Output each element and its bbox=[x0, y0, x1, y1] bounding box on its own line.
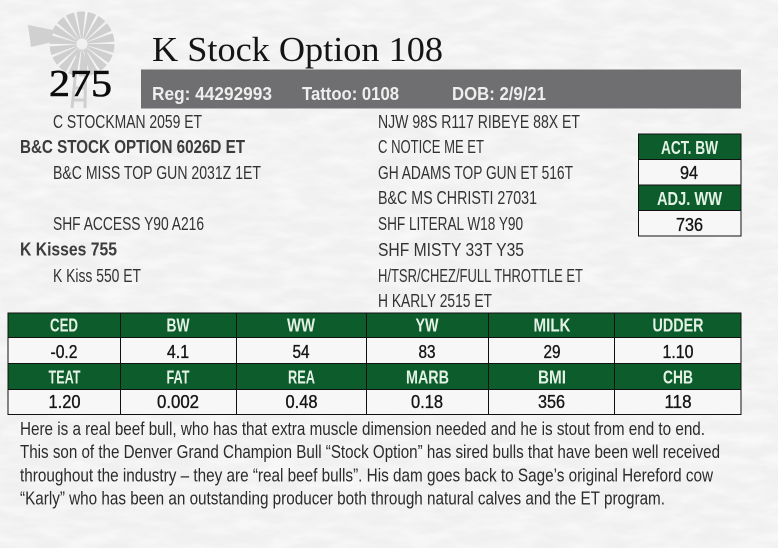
description paragraph bbox=[20, 419, 720, 508]
pedigree: right column: H/TSR/CHEZ/FULL THROTTLE ET bbox=[378, 266, 583, 286]
icon: windmill watermark bbox=[28, 25, 101, 108]
adjusted weaning weight: ADJ. WW bbox=[657, 188, 722, 209]
EPD row 1 values: 29 bbox=[544, 341, 560, 362]
EPD row 2 values: 0.48 bbox=[286, 391, 318, 412]
pedigree: left column: SHF ACCESS Y90 A216 bbox=[53, 214, 204, 234]
EPD row 2 headers: CHB bbox=[663, 366, 693, 388]
EPD row 1 headers: YW bbox=[416, 314, 439, 336]
description paragraph: “Karly” who has been an outstanding producer both through natural calves and the ET program. bbox=[20, 488, 665, 508]
EPD row 2 headers: MARB bbox=[406, 366, 449, 388]
pedigree: right column: B&C MS CHRISTI 27031 bbox=[378, 188, 537, 208]
tattoo: Tattoo: 0108 bbox=[302, 84, 399, 104]
pedigree: right column: C NOTICE ME ET bbox=[378, 137, 484, 157]
EPD row 1 values: 1.10 bbox=[662, 341, 694, 362]
pedigree: left column bbox=[20, 112, 261, 286]
EPD row 1 headers: CED bbox=[50, 314, 78, 336]
EPD row 2 headers: BMI bbox=[538, 366, 566, 388]
EPD row 1 headers: UDDER bbox=[652, 314, 704, 336]
EPD row 2 values bbox=[48, 391, 692, 412]
EPD row 1 values: 54 bbox=[292, 341, 310, 362]
pedigree: right column: H KARLY 2515 ET bbox=[378, 291, 492, 311]
pedigree: left column: B&C MISS TOP GUN 2031Z 1ET bbox=[53, 163, 261, 183]
EPD row 2 values: 0.002 bbox=[157, 391, 199, 412]
EPD row 2 headers: FAT bbox=[166, 366, 190, 388]
EPD row 1 headers: WW bbox=[287, 314, 315, 336]
EPD row 2 values: 356 bbox=[538, 391, 565, 412]
EPD row 2 headers bbox=[48, 366, 693, 388]
pedigree: right column bbox=[378, 112, 583, 311]
EPD row 1 headers bbox=[50, 314, 704, 336]
EPD row 1 values: -0.2 bbox=[50, 341, 78, 362]
actual birth weight: ACT. BW bbox=[661, 137, 718, 158]
pedigree: right column: SHF LITERAL W18 Y90 bbox=[378, 214, 523, 234]
pedigree: right column: NJW 98S R117 RIBEYE 88X ET bbox=[378, 112, 580, 132]
EPD row 2 values: 0.18 bbox=[411, 391, 443, 412]
EPD row 1 values: 83 bbox=[418, 341, 436, 362]
weights table bbox=[638, 134, 741, 236]
EPD row 1 headers: MILK bbox=[534, 314, 571, 336]
EPD row 1 values bbox=[50, 341, 694, 362]
EPD row 2 values: 118 bbox=[664, 391, 692, 412]
pedigree: left column: K Kiss 550 ET bbox=[53, 266, 141, 286]
pedigree: right column: SHF MISTY 33T Y35 bbox=[378, 240, 524, 260]
weights table: 736 bbox=[676, 214, 703, 235]
EPD row 2 headers: REA bbox=[288, 366, 315, 388]
pedigree: left column: B&C STOCK OPTION 6026D ET bbox=[20, 137, 245, 157]
weights table: 94 bbox=[680, 162, 698, 183]
pedigree: left column: K Kisses 755 bbox=[20, 240, 117, 260]
date of birth: DOB: 2/9/21 bbox=[452, 84, 546, 104]
lot number: 275 bbox=[49, 63, 112, 105]
pedigree: left column: C STOCKMAN 2059 ET bbox=[53, 112, 202, 132]
EPD row 2 headers: TEAT bbox=[48, 366, 81, 388]
registration bar bbox=[141, 70, 741, 108]
title: K Stock Option 108 bbox=[152, 30, 443, 69]
pedigree: right column: GH ADAMS TOP GUN ET 516T bbox=[378, 163, 573, 183]
EPD row 2 values: 1.20 bbox=[48, 391, 80, 412]
EPD table bbox=[8, 313, 741, 414]
EPD row 1 values: 4.1 bbox=[167, 341, 189, 362]
registration number: Reg: 44292993 bbox=[152, 84, 272, 104]
EPD row 1 headers: BW bbox=[166, 314, 190, 336]
